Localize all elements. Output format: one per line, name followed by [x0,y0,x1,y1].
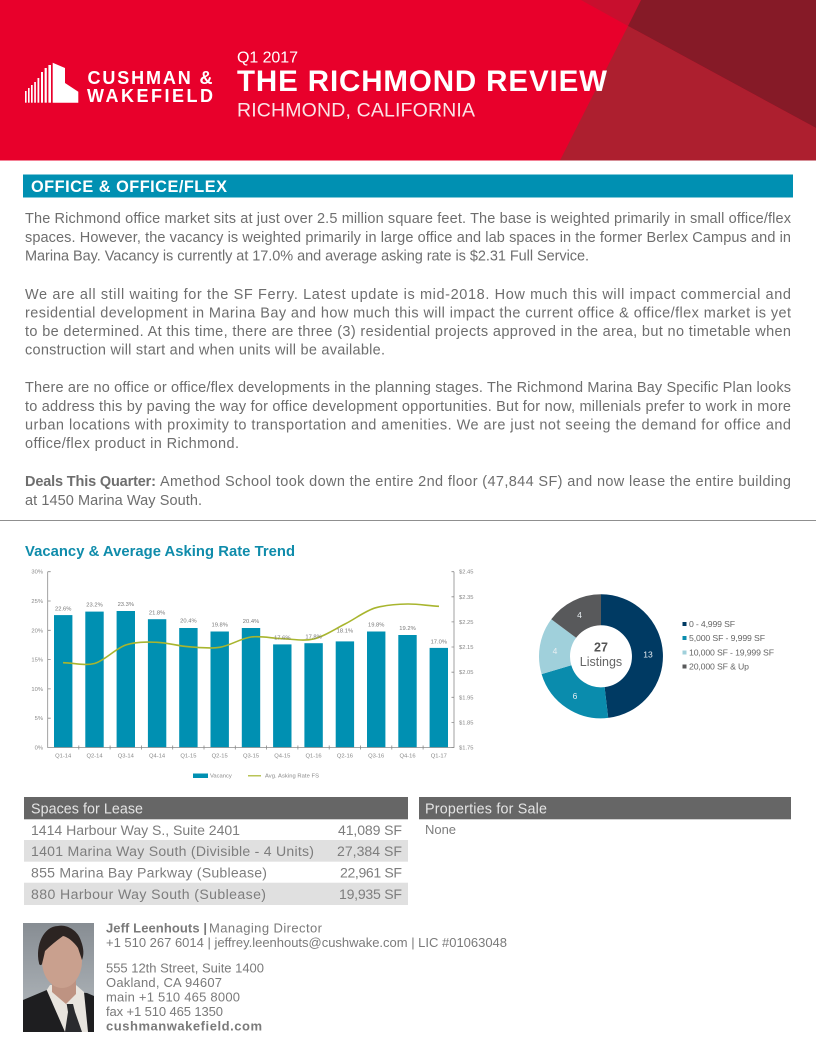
text block: developments: There are no office or office/flex developments in the planning stages. The Richmond Marina Bay Specific Plan looks [25,380,791,396]
table: spaces for lease: 27,384 SF [337,843,402,859]
chart legend: Vacancy [210,774,232,780]
text block: deals this quarter: Deals This Quarter: [25,474,156,490]
bar value labels: 21.8% [149,610,165,616]
donut legend: 20,000 SF & Up [689,662,749,672]
quarter labels: Q1-16 [306,754,322,760]
quarter labels: Q1-14 [55,754,72,760]
contact block: cushmanwakefield.com [106,1018,262,1034]
title block: THE RICHMOND REVIEW [237,65,607,98]
icon: Cushman & Wakefield logo: CUSHMAN & [88,68,212,88]
bar value labels: 20.4% [180,618,197,624]
bar value labels: 17.6% [274,636,291,642]
quarter labels: Q2-16 [337,754,353,760]
right axis labels: $2.15 [459,645,474,651]
bar value labels: 17.8% [305,634,322,640]
left axis labels: 5% [35,716,43,722]
donut chart: listings by size: 27 [594,640,608,654]
donut legend: 5,000 SF - 9,999 SF [689,633,765,643]
line: average asking rate [63,604,439,664]
table: properties for sale: None [425,822,456,837]
text block: SF Ferry: We are all still waiting for the SF Ferry. Latest update is mid-2018. How much this will impact commercial and [25,287,791,303]
contact block: 555 12th Street, Suite 1400 [106,960,264,976]
quarter labels: Q3-15 [243,754,259,760]
bar value labels: 23.3% [118,602,134,608]
header banner [0,0,816,160]
chart heading: Vacancy & Average Asking Rate Trend [25,544,295,560]
axes [48,572,454,750]
table: spaces for lease: 22,961 SF [340,864,402,880]
title block [237,50,607,122]
text block: SF Ferry: residential development in Marina Bay and how much this will impact the current office & office/flex market is yet [25,306,791,322]
quarter labels: Q2-15 [212,754,228,760]
bar value labels: 20.4% [243,619,259,625]
donut legend [682,619,774,672]
donut chart: listings by size: 4 [553,646,558,656]
donut legend: 10,000 SF - 19,999 SF [689,648,774,658]
chart legend [193,774,319,780]
quarter labels: Q4-16 [399,754,416,760]
table: spaces for lease: 41,089 SF [338,822,402,838]
table: spaces for lease: 880 Harbour Way South (Sublease) [31,886,266,902]
title block: RICHMOND, CALIFORNIA [237,100,475,122]
contact block: Oakland, CA 94607 [106,975,222,990]
right axis labels: $1.75 [459,746,474,752]
right axis labels [459,570,474,752]
contact block: main +1 510 465 8000 [106,990,240,1004]
quarter labels: Q4-14 [149,754,166,760]
section heading: office & office/flex [23,174,793,198]
left axis labels: 30% [31,570,43,576]
left axis labels: 0% [35,746,43,752]
contact block: +1 510 267 6014 | jeffrey.leenhouts@cushwake.com | LIC #01063048 [106,935,507,950]
bars: vacancy [54,611,448,748]
text block: developments: office/flex product in Richmond. [25,436,239,452]
donut chart: listings by size: 4 [577,610,582,620]
left axis labels: 20% [31,628,43,634]
text block: developments: urban locations with proximity to transportation and amenities. We are just not seeing the demand for office and [25,418,791,434]
bar value labels: 18.1% [337,628,353,634]
text block: market overview [25,211,792,264]
donut chart: listings by size: Listings [580,655,622,669]
photo: Jeff Leenhouts portrait [23,923,94,1032]
icon: Cushman & Wakefield logo: WAKEFIELD [87,86,213,106]
text block: market overview: Marina Bay. Vacancy is currently at 17.0% and average asking rate is $2.31 Full Service. [25,248,589,264]
bar value labels: 22.6% [55,606,71,612]
right axis labels: $2.45 [459,570,474,576]
text block: SF Ferry: construction will start and when units will be available. [25,342,385,358]
left axis labels: 15% [31,658,43,664]
donut chart: listings by size: 13 [643,650,653,660]
right axis labels: $2.05 [459,670,474,676]
donut legend: 0 - 4,999 SF [689,619,735,629]
quarter labels [55,754,447,760]
table: spaces for lease: Spaces for Lease [31,802,143,818]
contact block [106,920,507,1034]
bar value labels: 17.0% [431,640,447,646]
right axis labels: $1.85 [459,720,474,726]
right axis labels: $2.35 [459,595,474,601]
quarter labels: Q2-14 [86,754,103,760]
contact block: Managing Director [209,920,323,936]
table: spaces for lease: 855 Marina Bay Parkway (Sublease) [31,864,267,880]
quarter labels: Q1-17 [431,754,447,760]
table: spaces for lease [24,797,408,905]
contact block: fax +1 510 465 1350 [106,1004,223,1019]
text block: developments [25,380,791,452]
text block: market overview: The Richmond office market sits at just over 2.5 million square feet. The base is weighted primarily in small office/flex [25,211,792,227]
text block: SF Ferry [25,287,791,358]
donut chart: listings by size [553,610,653,703]
text block: deals this quarter [25,474,791,509]
table: spaces for lease: 19,935 SF [339,886,402,902]
bar value labels [55,602,447,646]
chart legend: Avg. Asking Rate FS [265,774,319,780]
section heading: office & office/flex: OFFICE & OFFICE/FLEX [31,178,227,196]
quarter labels: Q1-15 [180,754,196,760]
left axis labels: 10% [31,687,43,693]
table: properties for sale: Properties for Sale [425,802,547,818]
table: spaces for lease: 1401 Marina Way South (Divisible - 4 Units) [31,843,314,859]
left axis labels [31,570,43,752]
bar value labels: 19.2% [399,626,416,632]
table: spaces for lease: 1414 Harbour Way S., Suite 2401 [31,822,240,838]
text block: deals this quarter: at 1450 Marina Way South. [25,493,202,509]
bar value labels: 19.8% [211,622,228,628]
quarter labels: Q3-14 [118,754,135,760]
text block: deals this quarter: Amethod School took down the entire 2nd floor (47,844 SF) and now lease the entire building [160,474,791,490]
text block: market overview: spaces. However, the vacancy is weighted primarily in large office and lab spaces in the former Berlex Campus and in [25,230,791,246]
bar value labels: 19.8% [368,622,384,628]
text block: developments: to address this by paving the way for office development opportunities. But for now, millenials prefer to work in more [25,399,791,415]
right axis labels: $2.25 [459,620,474,626]
donut chart: listings by size: 6 [573,691,578,701]
bar value labels: 23.2% [86,602,103,608]
bar and line chart: vacancy and asking rate [31,570,474,780]
title block: Q1 2017 [237,50,298,66]
contact block: Jeff Leenhouts | [106,920,207,936]
text block: SF Ferry: to be determined. At this time, there are three (3) residential projects approved in the area, but no timetable when [25,324,791,340]
quarter labels: Q4-15 [274,754,290,760]
left axis labels: 25% [31,599,43,605]
table: properties for sale [419,797,791,837]
right axis labels: $1.95 [459,695,474,701]
icon: Cushman & Wakefield logo [25,63,213,106]
quarter labels: Q3-16 [368,754,384,760]
